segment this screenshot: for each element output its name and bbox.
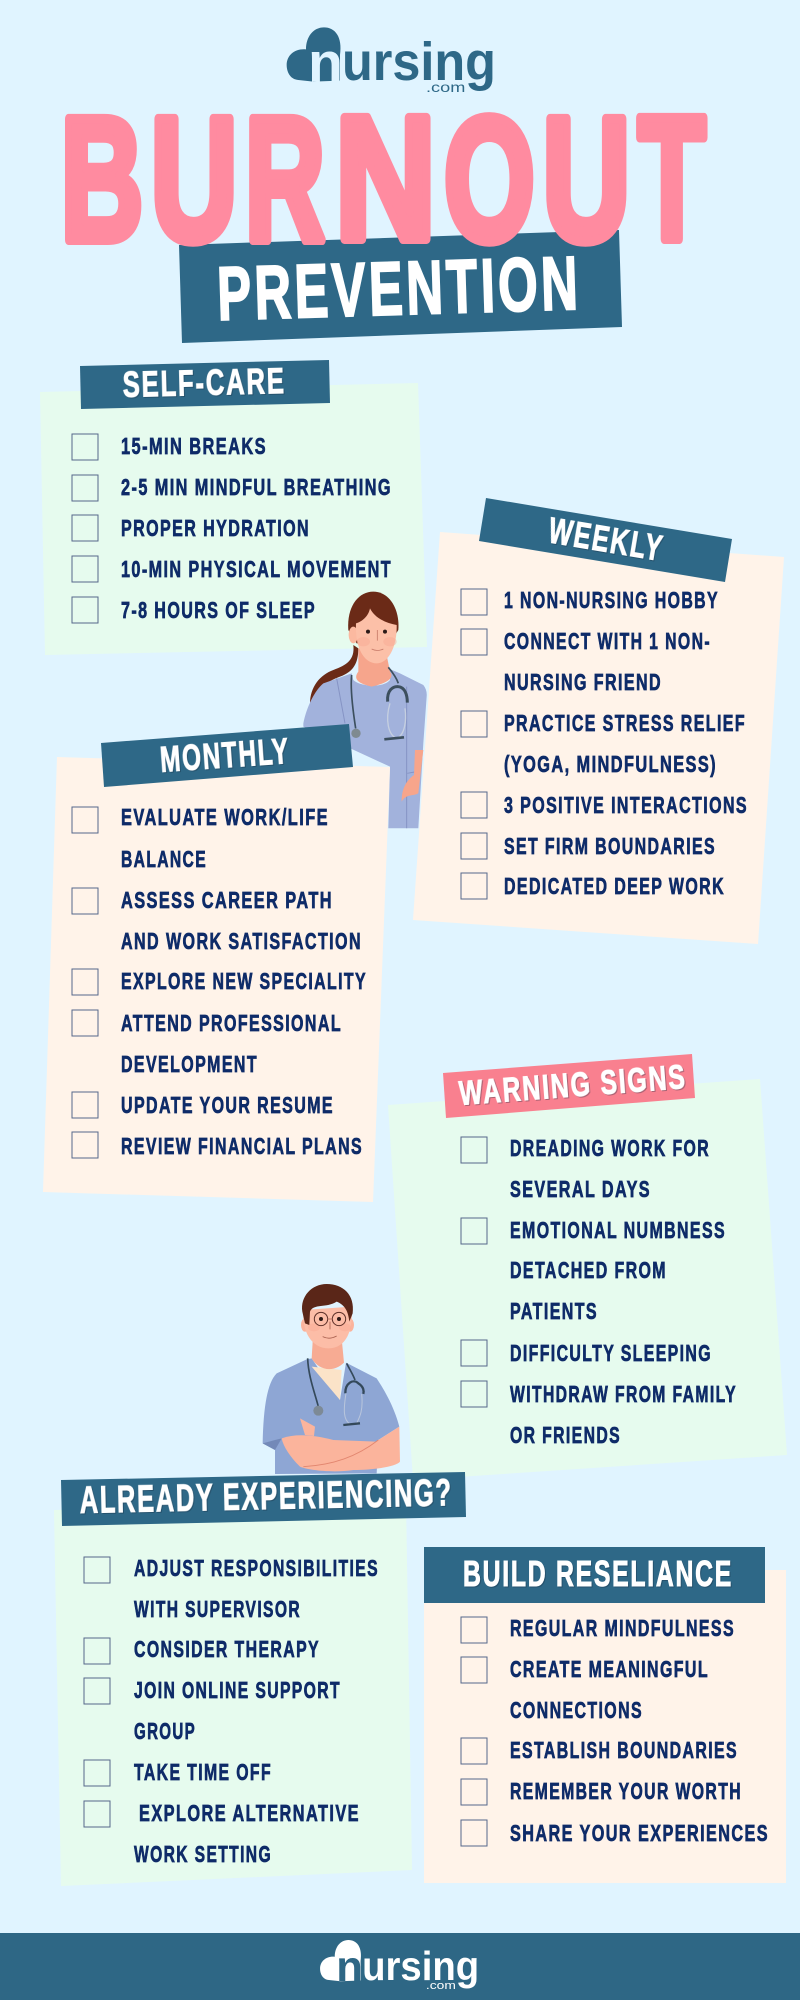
item: time off: TAKE TIME OFF — [134, 1759, 272, 1785]
item: meaningful connections — [461, 1656, 709, 1723]
illustration: male nurse — [263, 1284, 400, 1474]
panel: self-care — [40, 360, 427, 655]
item: non-nursing friend: NURSING FRIEND — [504, 669, 662, 695]
item: physical movement: 10-MIN PHYSICAL MOVEMENT — [121, 556, 392, 582]
item: meaningful connections: CONNECTIONS — [510, 1697, 643, 1723]
item: emotional numbness: PATIENTS — [510, 1298, 598, 1324]
title: burnout: B — [61, 82, 143, 278]
title: burnout: T — [638, 81, 706, 277]
logo: nursing.com footer: ursing — [362, 1943, 479, 1989]
item: stress relief — [461, 710, 746, 777]
item: financial plans — [72, 1132, 363, 1159]
item: 15-min breaks — [72, 433, 267, 460]
heading: monthly: MONTHLY — [159, 730, 291, 780]
item: work/life balance — [72, 804, 329, 872]
heading: already experiencing: ALREADY EXPERIENCING? — [79, 1472, 453, 1522]
title: burnout: N — [335, 81, 436, 277]
item: withdraw: OR FRIENDS — [510, 1422, 621, 1448]
item: financial plans: REVIEW FINANCIAL PLANS — [121, 1133, 363, 1159]
title: burnout — [61, 81, 706, 278]
item: non-nursing friend: CONNECT WITH 1 NON- — [504, 628, 711, 654]
item: work/life balance: BALANCE — [121, 846, 207, 872]
item: dreading work — [461, 1135, 710, 1202]
item: time off — [84, 1759, 272, 1786]
item: alternative work setting: WORK SETTING — [134, 1841, 272, 1867]
item: assess career path: AND WORK SATISFACTION — [121, 928, 362, 954]
logo: nursing.com top: .com — [426, 79, 465, 95]
item: adjust responsibilities: WITH SUPERVISOR — [134, 1596, 301, 1622]
item: 15-min breaks: 15-MIN BREAKS — [121, 433, 267, 459]
heading: weekly — [479, 498, 732, 582]
logo: nursing.com top: ursing — [342, 33, 496, 92]
item: sleep: 7-8 HOURS OF SLEEP — [121, 597, 316, 623]
item: dreading work: SEVERAL DAYS — [510, 1176, 651, 1202]
item: mindful breathing — [72, 474, 392, 501]
logo: nursing.com footer: .com — [426, 1980, 456, 1992]
heading: weekly: WEEKLY — [546, 509, 667, 569]
item: alternative work setting — [84, 1800, 360, 1867]
item: new speciality: EXPLORE NEW SPECIALITY — [121, 968, 367, 994]
title: burnout: O — [444, 82, 535, 278]
logo: nursing.com footer — [320, 1940, 479, 1992]
title: burnout: U — [542, 82, 630, 278]
heading: self-care — [80, 360, 330, 409]
item: update resume: UPDATE YOUR RESUME — [121, 1092, 334, 1118]
panel: build reseliance — [424, 1547, 786, 1883]
item: meaningful connections: CREATE MEANINGFUL — [510, 1656, 709, 1682]
heading: monthly — [101, 724, 353, 787]
item: support group: JOIN ONLINE SUPPORT — [134, 1677, 341, 1703]
logo: nursing.com top — [287, 27, 496, 95]
item: adjust responsibilities: ADJUST RESPONSIBILITIES — [134, 1555, 379, 1581]
item: therapy — [84, 1636, 320, 1664]
item: assess career path — [72, 887, 362, 954]
heading: warning signs — [443, 1054, 695, 1118]
panel: monthly — [43, 724, 390, 1202]
item: withdraw — [461, 1381, 737, 1448]
item: emotional numbness — [461, 1217, 726, 1324]
item: work/life balance: EVALUATE WORK/LIFE — [121, 804, 329, 830]
item: professional development — [72, 1010, 342, 1077]
heading: already experiencing — [61, 1472, 466, 1526]
item: assess career path: ASSESS CAREER PATH — [121, 887, 333, 913]
panel: already experiencing — [54, 1472, 466, 1886]
heading: warning signs: WARNING SIGNS — [458, 1058, 688, 1113]
item: establish boundaries — [461, 1737, 738, 1764]
item: deep work — [461, 873, 725, 899]
heading: self-care: SELF-CARE — [122, 360, 286, 405]
banner: prevention: PREVENTION — [216, 241, 582, 337]
item: support group: GROUP — [134, 1718, 196, 1744]
item: therapy: CONSIDER THERAPY — [134, 1636, 320, 1662]
item: firm boundaries — [461, 833, 716, 859]
banner: prevention — [179, 230, 622, 343]
panel: weekly — [413, 498, 784, 944]
item: mindful breathing: 2-5 MIN MINDFUL BREATHING — [121, 474, 392, 500]
item: physical movement — [72, 556, 392, 582]
item: new speciality — [72, 968, 367, 995]
illustration: female nurse — [303, 592, 427, 828]
item: support group — [84, 1677, 341, 1744]
item: remember your worth — [461, 1778, 742, 1805]
item: non-nursing friend — [461, 628, 711, 695]
item: non-nursing hobby — [461, 587, 719, 615]
item: dreading work: DREADING WORK FOR — [510, 1135, 710, 1161]
item: hydration — [72, 515, 310, 541]
item: sleep — [72, 597, 316, 623]
item: alternative work setting: EXPLORE ALTERNATIVE — [139, 1800, 360, 1826]
logo: nursing.com top: n — [308, 30, 343, 93]
item: adjust responsibilities — [84, 1555, 379, 1622]
title: burnout: R — [245, 82, 325, 278]
logo: nursing.com footer: n — [336, 1943, 363, 1991]
item: difficulty sleeping — [461, 1340, 712, 1366]
item: professional development: DEVELOPMENT — [121, 1051, 258, 1077]
item: professional development: ATTEND PROFESSIONAL — [121, 1010, 342, 1036]
panel: warning signs — [388, 1054, 787, 1480]
item: regular mindfulness — [461, 1615, 735, 1643]
item: emotional numbness: DETACHED FROM — [510, 1257, 667, 1283]
title: burnout: U — [151, 82, 238, 278]
item: hydration: PROPER HYDRATION — [121, 515, 310, 541]
footer band — [0, 1933, 800, 2000]
item: update resume — [72, 1092, 334, 1118]
item: difficulty sleeping: DIFFICULTY SLEEPING — [510, 1340, 712, 1366]
heading: build reseliance — [424, 1547, 765, 1603]
item: stress relief: (YOGA, MINDFULNESS) — [504, 751, 717, 777]
